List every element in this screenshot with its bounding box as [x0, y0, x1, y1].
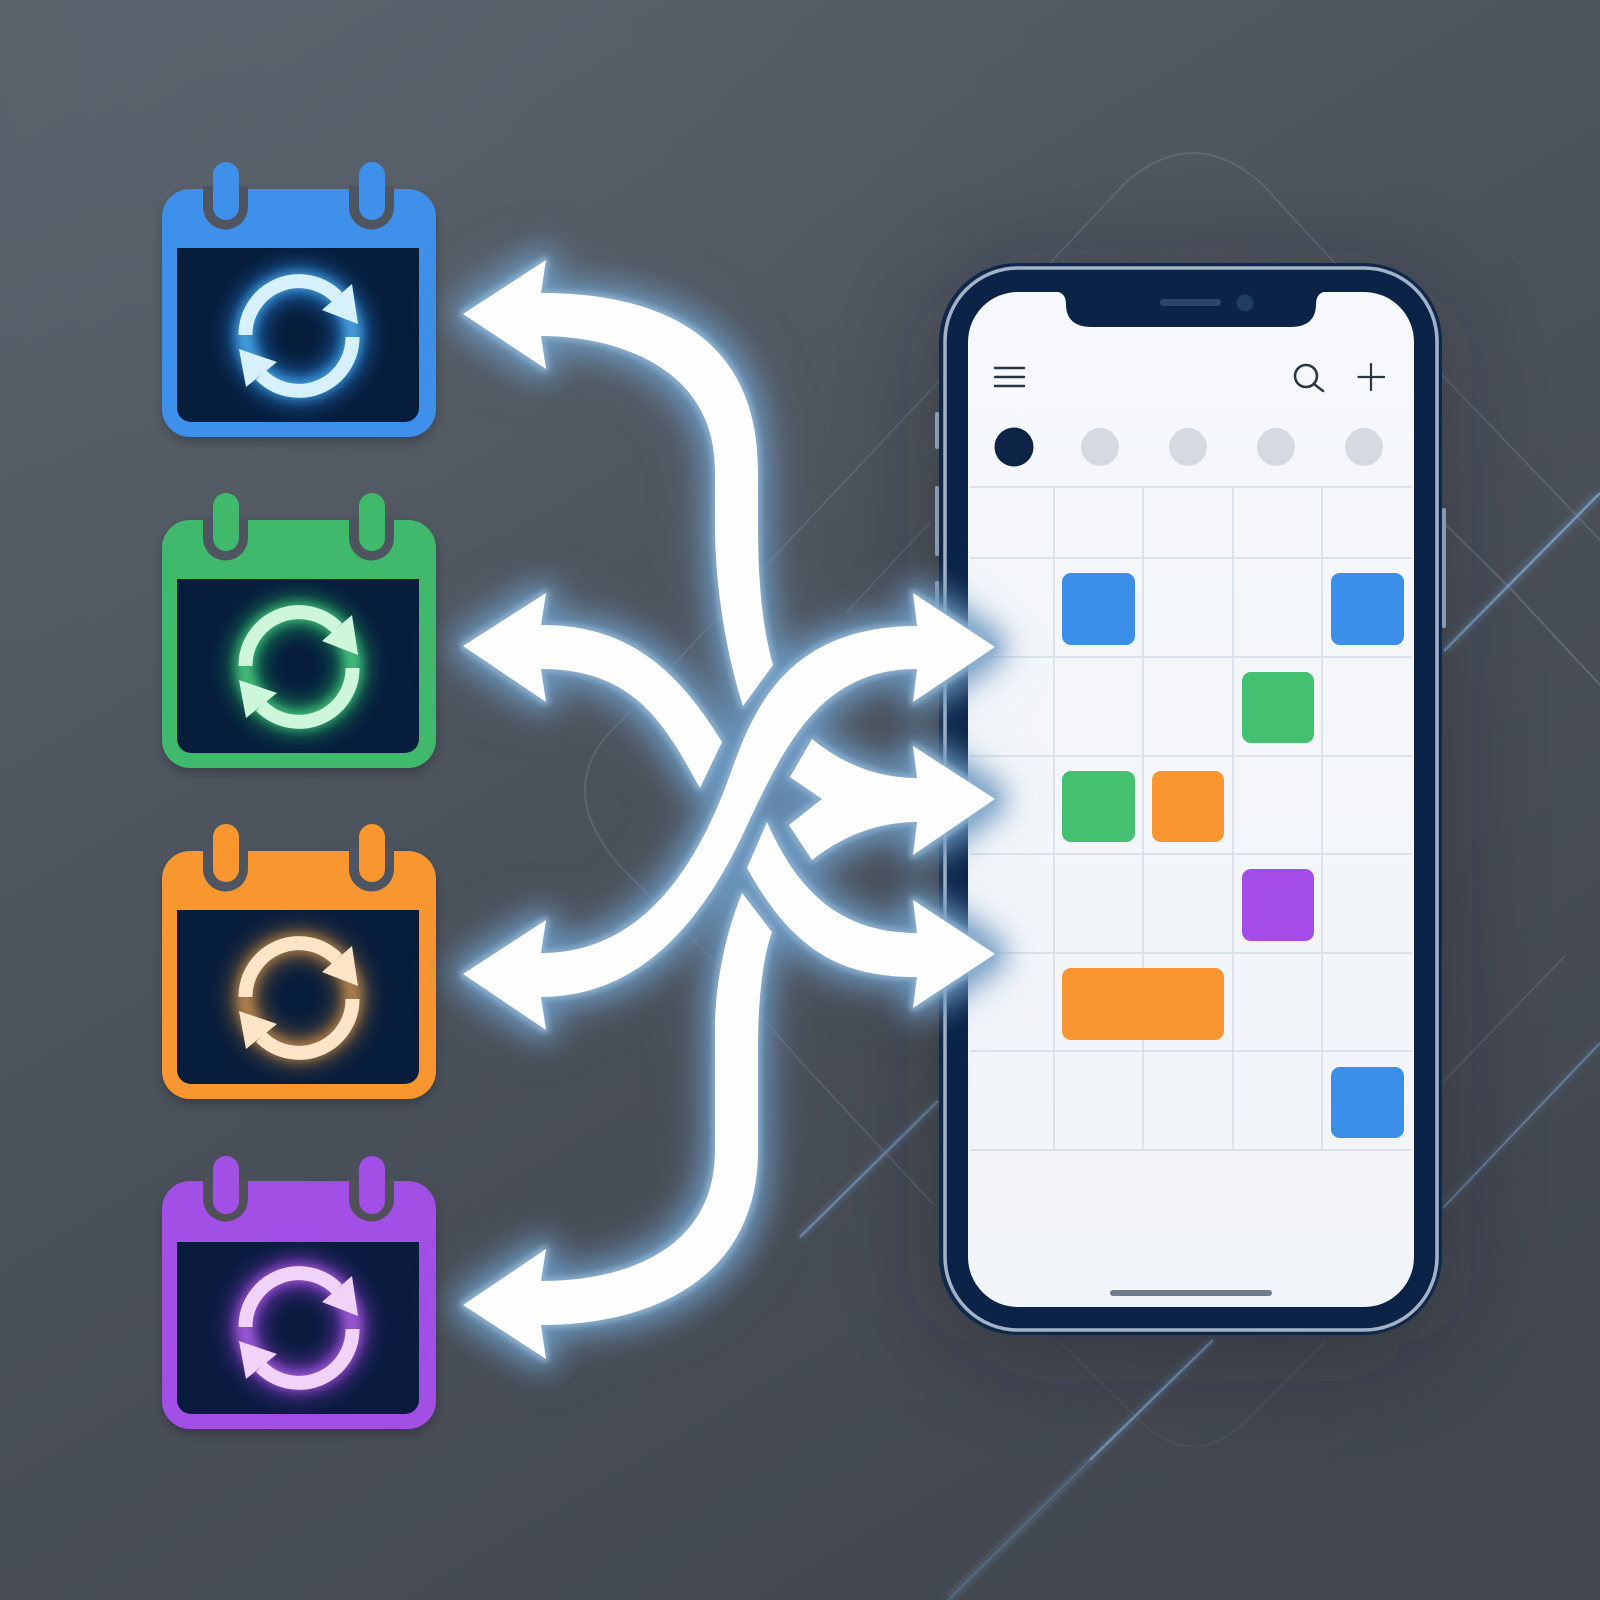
screen — [177, 910, 419, 1084]
screen — [968, 292, 1414, 1307]
arrow: lower into phone — [747, 822, 995, 1008]
rings — [213, 1156, 385, 1214]
arrow: to purple calendar — [463, 893, 772, 1359]
phone body — [939, 263, 1442, 1335]
icon: search — [1295, 365, 1323, 391]
phone — [935, 263, 1446, 1345]
rings — [213, 493, 385, 551]
arrows: sync flows — [463, 260, 995, 1359]
screen — [177, 248, 419, 422]
screen — [177, 1242, 419, 1414]
arrow: middle into phone — [789, 739, 995, 860]
rings — [213, 162, 385, 220]
icon: add — [1358, 364, 1384, 390]
calendar: blue — [162, 162, 436, 443]
day selector — [994, 428, 1383, 466]
arrow: to green calendar — [463, 593, 722, 788]
home indicator — [1110, 1290, 1272, 1296]
icon: sync arrows — [239, 1273, 358, 1383]
arrow: to blue calendar — [463, 260, 773, 706]
calendar: purple — [162, 1156, 436, 1435]
side buttons — [935, 412, 1446, 651]
arrow: orange calendar to phone, double headed — [463, 593, 995, 1030]
icon: sync arrows — [239, 943, 358, 1053]
rings — [213, 824, 385, 882]
screen — [177, 579, 419, 753]
calendar grid — [970, 487, 1412, 1150]
calendar events — [1062, 573, 1404, 1138]
icon: sync arrows — [239, 281, 358, 391]
calendar: orange — [162, 824, 436, 1105]
icon: menu — [995, 368, 1024, 386]
calendar: green — [162, 493, 436, 774]
notch — [1054, 291, 1328, 327]
icon: sync arrows — [239, 612, 358, 722]
